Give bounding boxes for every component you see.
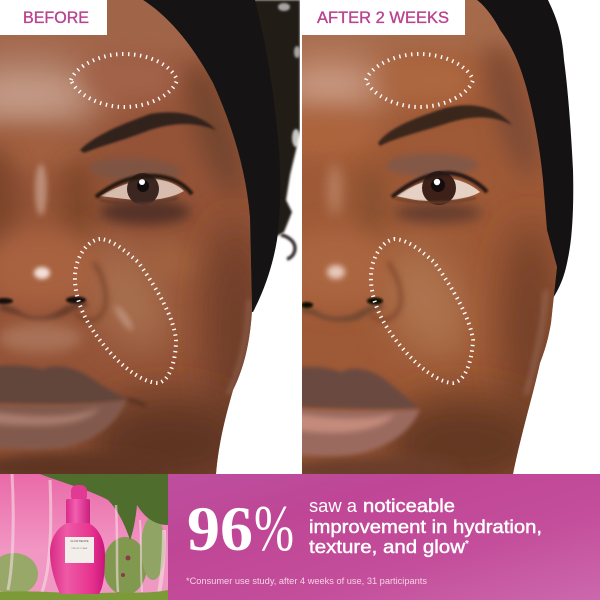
callout: forehead area (366, 54, 473, 107)
callout: cheek area (371, 239, 473, 383)
eye (96, 173, 192, 205)
bottle label: PRICKLY PEAR (72, 547, 88, 550)
eyebrow (378, 105, 512, 146)
headband (470, 0, 573, 300)
nose bridge (0, 142, 96, 242)
forehead (302, 0, 541, 177)
statement text: saw a (309, 496, 358, 516)
label: after 2 weeks (302, 0, 465, 35)
eyebrow (80, 112, 216, 153)
label: before: BEFORE (23, 8, 89, 27)
statement text: noticeable (363, 496, 455, 516)
panel: product image (0, 474, 168, 600)
nose bridge (328, 164, 385, 245)
lips (297, 367, 420, 456)
eye socket (386, 153, 482, 223)
callout: forehead area (71, 54, 177, 107)
forehead (0, 0, 254, 202)
nose (302, 229, 406, 324)
statement text: improvement in hydration, (309, 517, 542, 537)
bottle label: GLOW RECIPE (70, 539, 89, 543)
cactus pads: right (103, 516, 165, 595)
cheek shading (302, 216, 557, 474)
label: after 2 weeks: AFTER 2 WEEKS (317, 8, 449, 27)
statement text: * (465, 539, 469, 550)
bottle label (65, 537, 94, 563)
eye socket (88, 156, 191, 225)
panel: stat banner (168, 474, 600, 600)
stat: 96%: 96 (187, 493, 253, 564)
face (0, 0, 252, 474)
stat: 96% (187, 492, 294, 565)
leaf (40, 474, 168, 540)
cactus pad: left (0, 553, 38, 595)
panel: before photo (0, 0, 300, 495)
statement text: texture, and glow (309, 537, 466, 557)
statement text (309, 496, 542, 557)
panel: after photo (302, 0, 574, 474)
label: before (0, 0, 107, 35)
face (302, 0, 557, 474)
lips (0, 365, 145, 449)
nose (0, 228, 106, 353)
cheek shading (0, 220, 261, 495)
bottle (50, 485, 105, 594)
callout: cheek area (75, 239, 176, 383)
ground (0, 590, 168, 600)
footnote: *Consumer use study, after 4 weeks of use, 31 participants (186, 576, 427, 587)
eye (392, 171, 487, 205)
hair and headband (130, 0, 300, 312)
gel strands (8, 474, 164, 598)
stat: 96%: % (254, 492, 294, 565)
